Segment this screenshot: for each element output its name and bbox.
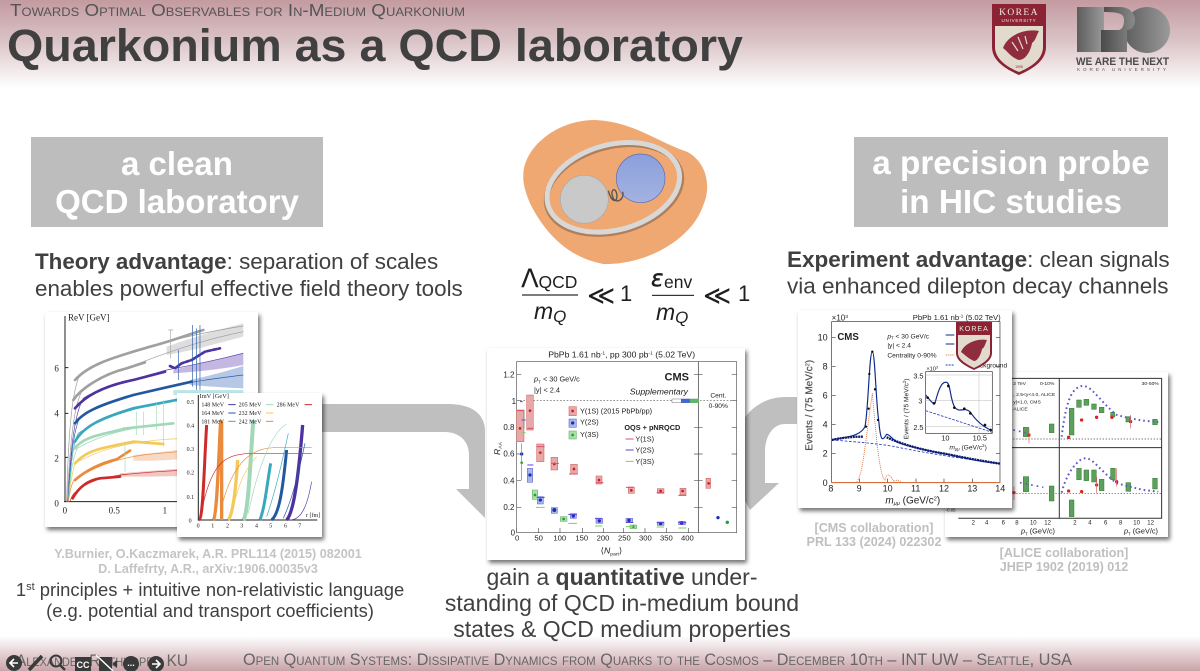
logo: Korea University shield: KOREA bbox=[999, 8, 1039, 18]
chart: imaginary part of potential inset: 242 MeV bbox=[239, 419, 262, 425]
chart: real part of potential: 6 bbox=[54, 364, 59, 374]
chart: imaginary part of potential inset: r [fm] bbox=[306, 512, 320, 519]
chart: CMS dimuon invariant mass: T bbox=[891, 336, 894, 341]
chart: CMS dimuon invariant mass: 8 bbox=[823, 362, 828, 372]
arrow: right to centre bbox=[735, 397, 797, 510]
chart: imaginary part of potential inset: 0.5 bbox=[187, 400, 194, 406]
chart: CMS dimuon invariant mass: 3 bbox=[918, 396, 922, 405]
chart: imaginary part of potential inset: ImV [GeV] bbox=[200, 393, 229, 400]
chart: imaginary part of potential inset: 148 MeV bbox=[201, 403, 225, 409]
logo: Korea University shield: UNIVERSITY bbox=[1001, 18, 1037, 23]
text: experiment advantage: via enhanced dilepton decay channels bbox=[787, 274, 1169, 298]
chart: ALICE nuclear modification panels: (GeV/c) bbox=[1028, 527, 1055, 536]
chart: ALICE nuclear modification panels: 2 TeV bbox=[1013, 381, 1027, 387]
chart: ALICE nuclear modification panels: , 2.5<y<4.0, ALICE bbox=[1013, 392, 1056, 398]
chart: CMS dimuon invariant mass: 9 bbox=[857, 483, 862, 493]
logo: Korea University shield watermark bbox=[956, 322, 992, 370]
chart: imaginary part of potential inset: 0.4 bbox=[187, 423, 194, 429]
formula: epsilon env over mQ bbox=[651, 266, 750, 327]
citation: Burnier et al: D. Laffefrty, A.R., arXiv:1906.00035v3 bbox=[98, 562, 318, 576]
chart: CMS dimuon invariant mass: 2 bbox=[902, 380, 907, 383]
footer: conference: Open Quantum Systems: Dissipative Dynamics from Quarks to the Cosmos – December 10th – INT UW – Seattle, USA bbox=[243, 650, 1073, 669]
chart: CMS RAA versus Npart: 100 bbox=[553, 534, 566, 543]
chart: CMS dimuon invariant mass: Events / (75 MeV/c bbox=[903, 383, 910, 439]
chart: imaginary part of potential inset: 181 MeV bbox=[201, 419, 225, 425]
chart: ALICE nuclear modification panels: 8 bbox=[1015, 520, 1019, 526]
chart: CMS RAA versus Npart: -1 bbox=[601, 351, 605, 357]
chart: ALICE nuclear modification panels: p bbox=[1123, 527, 1128, 536]
chart: CMS dimuon invariant mass: ×10 bbox=[926, 367, 936, 373]
footer: presenter: Alexander Rothkopf - KU bbox=[16, 651, 188, 670]
chart: imaginary part of potential inset: 3 bbox=[240, 524, 243, 530]
logo: 120 We are the next: KOREA UNIVERSITY bbox=[1077, 67, 1168, 72]
chart: CMS dimuon invariant mass: (5.02 TeV) bbox=[963, 313, 1001, 322]
chart: CMS RAA versus Npart: 200 bbox=[597, 534, 609, 543]
chart: CMS dimuon invariant mass: ) bbox=[985, 444, 987, 451]
panel: a precision probe in HIC studies bbox=[854, 137, 1168, 227]
panel: a clean QCD laboratory bbox=[31, 137, 323, 227]
chart: imaginary part of potential inset: 0.1 bbox=[187, 495, 194, 501]
chart: CMS RAA versus Npart: AA bbox=[498, 441, 504, 449]
chart: CMS RAA versus Npart: 0 bbox=[511, 528, 516, 537]
chart: CMS dimuon invariant mass: |y| < 2.4 bbox=[887, 342, 911, 349]
formula: Lambda QCD over mQ: 1 bbox=[620, 281, 632, 306]
chart: CMS RAA versus Npart: < 30 GeV/c bbox=[541, 375, 580, 384]
text: experiment advantage: Experiment advantage: clean signals bbox=[787, 247, 1170, 272]
formula: epsilon env over mQ: 1 bbox=[738, 281, 750, 306]
formula: epsilon env over mQ: Q bbox=[675, 308, 688, 327]
chart: CMS RAA versus Npart: ⟨N bbox=[601, 545, 610, 555]
icons: presentation toolbar bbox=[6, 655, 164, 671]
chart: real part of potential: 1 bbox=[163, 505, 167, 515]
chart: CMS dimuon invariant mass: 4 bbox=[823, 420, 828, 430]
chart: CMS dimuon invariant mass: p bbox=[886, 333, 891, 340]
chart: CMS dimuon invariant mass: 2 bbox=[823, 449, 828, 459]
title: Quarkonium as a QCD laboratory bbox=[7, 20, 744, 71]
chart: ALICE nuclear modification panels: 2 bbox=[1073, 520, 1077, 526]
chart: ALICE nuclear modification panels: 2 bbox=[972, 520, 976, 526]
chart: CMS RAA versus Npart: 300 bbox=[639, 534, 652, 543]
citation: CMS collaboration: [CMS collaboration] bbox=[815, 521, 933, 535]
text: quantitative understanding: standing of QCD in-medium bound bbox=[445, 590, 799, 616]
chart: real part of potential: 0 bbox=[54, 499, 59, 509]
chart: CMS RAA versus Npart: ⟩ bbox=[619, 545, 622, 555]
chart: CMS dimuon invariant mass: 2 bbox=[982, 443, 985, 448]
chart: CMS RAA versus Npart: 0.6 bbox=[503, 450, 515, 459]
chart: imaginary part of potential inset: 232 MeV bbox=[239, 411, 262, 417]
logo: Korea University shield: 1905 bbox=[1015, 65, 1023, 69]
chart: CMS dimuon invariant mass: (GeV/c bbox=[960, 444, 983, 451]
chart: CMS dimuon invariant mass: m bbox=[949, 444, 955, 451]
logo: Korea University shield bbox=[992, 4, 1046, 75]
chart: CMS dimuon invariant mass: ) bbox=[903, 378, 910, 381]
chart: CMS dimuon invariant mass: PbPb 1.61 nb bbox=[913, 313, 959, 322]
chart: ALICE nuclear modification panels: y|<1.0, CMS bbox=[1013, 399, 1041, 405]
formula: Lambda QCD over mQ: Λ bbox=[521, 264, 539, 294]
chart: imaginary part of potential inset: 1 bbox=[211, 524, 214, 530]
panel: a clean QCD laboratory: a clean bbox=[121, 145, 233, 182]
chart: imaginary part of potential inset: 5 bbox=[269, 524, 272, 530]
chart: CMS RAA versus Npart: 1 bbox=[512, 397, 517, 406]
chart: CMS RAA versus Npart: |y| < 2.4 bbox=[534, 385, 560, 394]
formula: epsilon env over mQ: env bbox=[664, 272, 692, 292]
illustration: quarkonium in medium bbox=[523, 120, 707, 264]
formula: Lambda QCD over mQ: m bbox=[534, 298, 553, 324]
chart: real part of potential: 4 bbox=[54, 409, 59, 419]
text: quantitative understanding: gain a quantitative under- bbox=[486, 564, 758, 590]
chart: CMS dimuon invariant mass: 2.5 bbox=[913, 423, 924, 432]
formula: Lambda QCD over mQ: QCD bbox=[538, 272, 577, 292]
formula: Lambda QCD over mQ: Q bbox=[553, 307, 566, 326]
chart: CMS RAA versus Npart: 350 bbox=[660, 534, 673, 543]
chart: CMS dimuon invariant mass: 10 bbox=[941, 434, 949, 443]
logo: 120 We are the next bbox=[1076, 7, 1170, 72]
chart: imaginary part of potential inset: 4 bbox=[255, 524, 258, 530]
chart: CMS RAA versus Npart: Υ(2S) bbox=[635, 446, 654, 455]
panel: a precision probe in HIC studies: a precision probe bbox=[872, 145, 1150, 182]
chart: imaginary part of potential inset: 164 MeV bbox=[201, 411, 225, 417]
citation: CMS collaboration: PRL 133 (2024) 022302 bbox=[807, 535, 941, 549]
chart: CMS RAA versus Npart: R bbox=[492, 449, 502, 455]
chart: CMS dimuon invariant mass bbox=[798, 310, 1012, 508]
chart: ALICE nuclear modification panels: 12 bbox=[1147, 520, 1155, 526]
chart: CMS dimuon invariant mass: 10 bbox=[818, 333, 828, 343]
chart: CMS dimuon invariant mass: 3 bbox=[936, 365, 939, 370]
chart: CMS dimuon invariant mass: Background bbox=[972, 362, 1007, 369]
logo: Korea University shield watermark: KOREA bbox=[959, 326, 989, 333]
chart: CMS RAA versus Npart: part bbox=[610, 551, 620, 557]
chart: CMS dimuon invariant mass: Centrality 0-90% bbox=[887, 352, 937, 359]
chart: CMS dimuon invariant mass: 8 bbox=[828, 483, 833, 493]
chart: CMS RAA versus Npart: Υ(3S) bbox=[580, 430, 599, 439]
chart: ALICE nuclear modification panels: ALICE bbox=[1013, 406, 1028, 412]
panel: a precision probe in HIC studies: in HIC studies bbox=[900, 184, 1122, 221]
panel: a clean QCD laboratory: QCD laboratory bbox=[55, 183, 300, 220]
chart: CMS dimuon invariant mass: μμ bbox=[954, 447, 960, 452]
chart: CMS dimuon invariant mass: ) bbox=[804, 360, 815, 363]
logo: 120 We are the next: WE ARE THE NEXT bbox=[1076, 56, 1169, 68]
chart: ALICE nuclear modification panels: 4 bbox=[985, 520, 989, 526]
chart: CMS RAA versus Npart: 0 bbox=[515, 534, 519, 543]
text: first principles: 1 bbox=[16, 579, 404, 600]
chart: CMS dimuon invariant mass: ×10 bbox=[832, 314, 845, 323]
chart: imaginary part of potential inset: 7 bbox=[298, 524, 301, 530]
formula: epsilon env over mQ: ≪ bbox=[703, 280, 731, 312]
chart: ALICE nuclear modification panels: 6 bbox=[1104, 520, 1108, 526]
chart: CMS RAA versus Npart: 150 bbox=[575, 534, 588, 543]
chart: CMS RAA versus Npart: Υ(1S) (2015 PbPb/pp) bbox=[580, 406, 652, 415]
chart: CMS dimuon invariant mass: 14 bbox=[995, 483, 1005, 493]
chart: ALICE nuclear modification panels: 10 bbox=[1133, 520, 1141, 526]
citation: Burnier et al: Y.Burnier, O.Kaczmarek, A.R. PRL114 (2015) 082001 bbox=[54, 547, 362, 561]
chart: ALICE nuclear modification panels: 10 bbox=[1030, 520, 1037, 526]
chart: CMS dimuon invariant mass: 0 bbox=[823, 478, 828, 488]
chart: imaginary part of potential inset: 0 bbox=[197, 524, 200, 530]
subtitle: Towards Optimal Observables for In-Medium Quarkonium bbox=[10, 0, 465, 20]
chart: CMS RAA versus Npart: 0-90% bbox=[709, 403, 728, 410]
chart: ALICE nuclear modification panels: T bbox=[1025, 531, 1028, 536]
chart: imaginary part of potential inset: 6 bbox=[284, 524, 287, 530]
chart: CMS RAA versus Npart: 0.4 bbox=[503, 476, 515, 485]
text: theory advantage: enables powerful effective field theory tools bbox=[35, 276, 463, 301]
chart: CMS dimuon invariant mass: Events / (75 MeV/c bbox=[804, 366, 815, 451]
chart: ALICE nuclear modification panels: 8 bbox=[1119, 520, 1123, 526]
chart: CMS dimuon invariant mass: 12 bbox=[939, 483, 949, 493]
chart: CMS dimuon invariant mass: 13 bbox=[967, 483, 977, 493]
chart: CMS RAA versus Npart: 1.2 bbox=[503, 370, 515, 379]
chart: CMS RAA versus Npart: PbPb 1.61 nb bbox=[548, 349, 601, 359]
chart: imaginary part of potential inset bbox=[177, 393, 322, 537]
arrow: left to centre bbox=[322, 404, 485, 518]
chart: CMS RAA versus Npart: Cent. bbox=[710, 392, 726, 399]
chart: CMS dimuon invariant mass: -1 bbox=[959, 314, 964, 319]
chart: real part of potential: ReV [GeV] bbox=[68, 313, 110, 323]
chart: CMS RAA versus Npart: 50 bbox=[534, 534, 543, 543]
chart: ALICE nuclear modification panels: 12 bbox=[1044, 520, 1052, 526]
chart: CMS dimuon invariant mass: 3 bbox=[845, 314, 848, 320]
chart: CMS dimuon invariant mass: 10.5 bbox=[973, 434, 987, 443]
chart: CMS RAA versus Npart: T bbox=[538, 379, 541, 384]
chart: CMS RAA versus Npart: 400 bbox=[681, 534, 694, 543]
chart: CMS RAA versus Npart bbox=[487, 348, 745, 560]
chart: CMS dimuon invariant mass: 11 bbox=[911, 483, 920, 493]
chart: ALICE nuclear modification panels bbox=[945, 372, 1168, 537]
chart: CMS dimuon invariant mass: ) bbox=[937, 495, 940, 506]
chart: real part of potential: 0 bbox=[63, 505, 68, 515]
chart: imaginary part of potential inset: 0.2 bbox=[187, 471, 194, 477]
chart: CMS RAA versus Npart: -1 bbox=[648, 351, 653, 357]
footer gradient band bbox=[0, 636, 1200, 671]
chart: imaginary part of potential inset: 205 MeV bbox=[239, 403, 262, 409]
text: theory advantage: Theory advantage: separation of scales bbox=[35, 249, 438, 274]
chart: CMS dimuon invariant mass: 6 bbox=[823, 391, 828, 401]
chart: CMS RAA versus Npart: p bbox=[533, 375, 538, 384]
chart: imaginary part of potential inset: 0 bbox=[189, 519, 192, 525]
chart: CMS dimuon invariant mass: μμ bbox=[893, 501, 900, 507]
chart: CMS dimuon invariant mass: 2 bbox=[934, 496, 937, 502]
chart: ALICE nuclear modification panels: 30-50% bbox=[1142, 381, 1159, 387]
chart: CMS RAA versus Npart: 0.8 bbox=[503, 423, 515, 432]
citation: ALICE collaboration: [ALICE collaboration] bbox=[1000, 546, 1128, 560]
formula: epsilon env over mQ: ε bbox=[651, 266, 663, 292]
chart: CMS RAA versus Npart: 250 bbox=[618, 534, 631, 543]
chart: ALICE nuclear modification panels: 0-10% bbox=[1040, 381, 1055, 387]
citation: ALICE collaboration: JHEP 1902 (2019) 012 bbox=[1000, 560, 1128, 574]
chart: ALICE nuclear modification panels: 6 bbox=[1002, 520, 1006, 526]
chart: CMS dimuon invariant mass: CMS bbox=[837, 332, 859, 343]
chart: CMS RAA versus Npart: OQS + pNRQCD bbox=[624, 423, 680, 432]
chart: CMS dimuon invariant mass: 3.5 bbox=[913, 372, 924, 381]
text: quantitative understanding: states & QCD medium properties bbox=[453, 616, 791, 642]
chart: CMS RAA versus Npart: , pp 300 pb bbox=[605, 349, 649, 359]
chart: ALICE nuclear modification panels: 4 bbox=[1088, 520, 1092, 526]
chart: real part of potential: 2 bbox=[54, 454, 59, 464]
chart: ALICE nuclear modification panels: -0.05 bbox=[946, 507, 956, 512]
formula: Lambda QCD over mQ bbox=[521, 264, 632, 326]
icons: presentation toolbar: CC bbox=[76, 660, 90, 670]
chart: CMS dimuon invariant mass: 10 bbox=[883, 483, 893, 493]
text: first principles: (e.g. potential and transport coefficients) bbox=[46, 600, 374, 621]
chart: CMS RAA versus Npart: Υ(3S) bbox=[635, 457, 654, 466]
chart: CMS dimuon invariant mass: 2 bbox=[805, 363, 811, 366]
header gradient band bbox=[0, 0, 1200, 88]
formula: epsilon env over mQ: m bbox=[656, 299, 675, 325]
formula: Lambda QCD over mQ: ≪ bbox=[587, 280, 615, 312]
chart: CMS RAA versus Npart: Υ(1S) bbox=[635, 435, 654, 444]
chart: ALICE nuclear modification panels: (GeV/c) bbox=[1131, 527, 1158, 536]
icons: presentation toolbar: ... bbox=[127, 658, 135, 668]
chart: CMS RAA versus Npart: Supplementary bbox=[630, 386, 689, 396]
text: first principles: st bbox=[26, 581, 35, 593]
chart: imaginary part of potential inset: 286 MeV bbox=[277, 403, 300, 409]
text: first principles: principles + intuitive non-relativistic language bbox=[35, 579, 404, 600]
chart: imaginary part of potential inset: 0.3 bbox=[187, 447, 194, 453]
chart: real part of potential: 0.5 bbox=[109, 505, 120, 515]
chart: real part of potential bbox=[45, 312, 258, 527]
chart: imaginary part of potential inset: 2 bbox=[226, 524, 229, 530]
chart: CMS RAA versus Npart: Υ(2S) bbox=[580, 418, 599, 427]
chart: ALICE nuclear modification panels: p bbox=[1020, 527, 1025, 536]
chart: CMS RAA versus Npart: 0.2 bbox=[503, 503, 515, 512]
chart: CMS RAA versus Npart: (5.02 TeV) bbox=[653, 349, 695, 359]
chart: CMS RAA versus Npart: CMS bbox=[665, 372, 689, 384]
chart: ALICE nuclear modification panels: T bbox=[1128, 531, 1131, 536]
chart: CMS dimuon invariant mass: m bbox=[885, 495, 894, 506]
chart: CMS dimuon invariant mass: < 30 GeV/c bbox=[894, 333, 930, 340]
chart: CMS dimuon invariant mass: (GeV/c bbox=[900, 495, 934, 506]
